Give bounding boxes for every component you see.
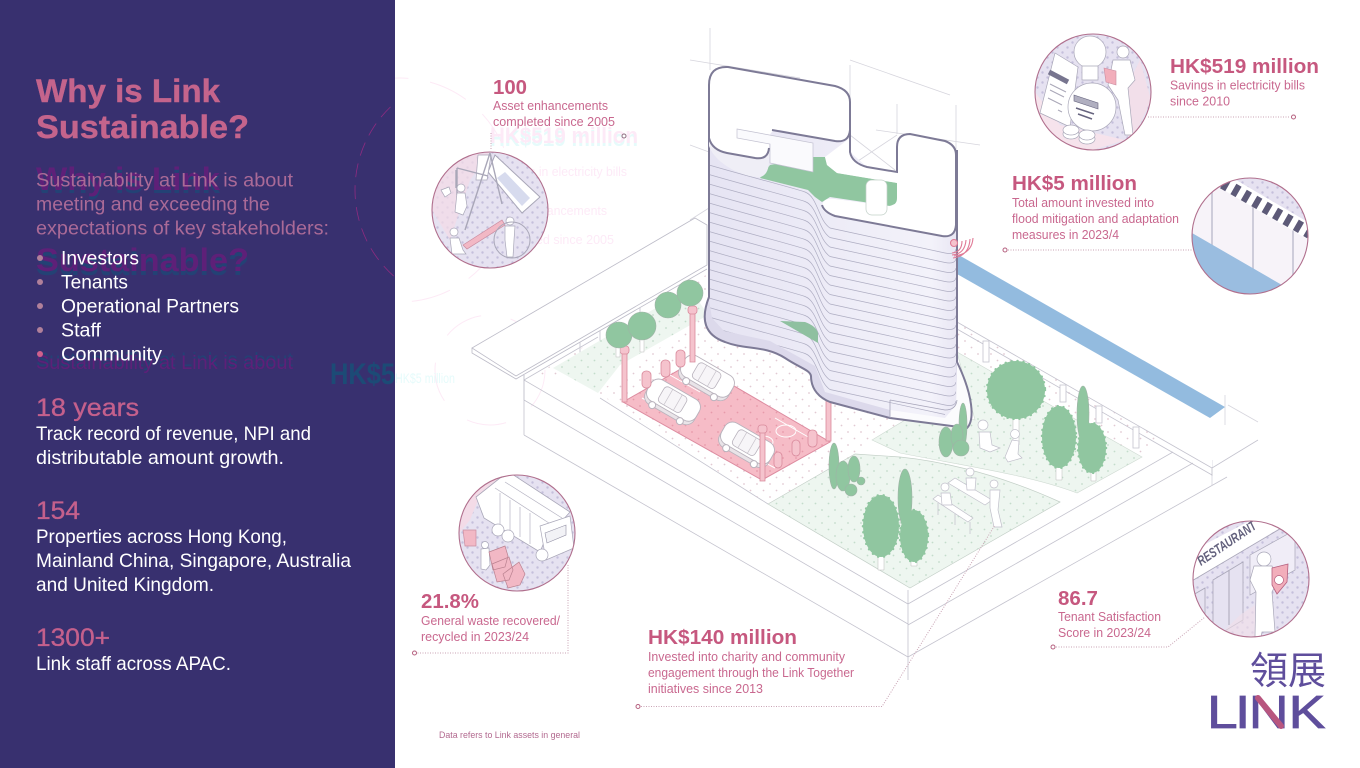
stat: 100 asset enhancements: completed since 2005 — [493, 114, 615, 129]
stat: 21.8% — [421, 591, 560, 644]
stat: HK$5 million: Total amount invested into — [1012, 195, 1154, 210]
footnote: Data refers to Link assets in general — [439, 730, 580, 741]
stat: 18 years: distributable amount growth. — [36, 447, 284, 469]
stat: 86.7: Score in 2023/24 — [1058, 625, 1151, 640]
light posts — [620, 306, 833, 481]
stakeholder list: Investors — [61, 248, 139, 270]
stat: HK$140 million: Invested into charity and community — [648, 649, 845, 664]
stat: 154 properties: and United Kingdom. — [36, 574, 214, 596]
stat: 86.7: Tenant Satisfaction — [1058, 609, 1161, 624]
pale ghost artefacts on white: HK$5 million — [395, 370, 455, 386]
logo: Link: LINK — [1207, 686, 1326, 738]
construction lines — [690, 28, 1258, 485]
dotted ground — [598, 312, 960, 504]
trees: left lawn — [606, 280, 703, 357]
stat: 21.8%: 21.8% — [421, 591, 479, 613]
chargers — [642, 350, 817, 468]
cars — [640, 352, 778, 473]
trees: front lawn — [829, 443, 928, 570]
stat: 154 properties — [36, 497, 351, 596]
pale ghost artefacts on white: HK$519 million — [490, 123, 638, 148]
stat: 86.7 — [1058, 588, 1161, 640]
stat: 21.8%: General waste recovered/ — [421, 613, 560, 628]
stat: 1300+ staff: Link staff across APAC. — [36, 653, 231, 675]
stat: HK$140 million — [648, 627, 855, 696]
stat: 1300+ staff: 1300+ — [36, 624, 110, 652]
icon: wifi signal on tower — [950, 238, 973, 258]
stat: 86.7: 86.7 — [1058, 588, 1098, 610]
vignette: flood barrier — [1191, 178, 1309, 294]
deck edge lines — [524, 337, 1227, 680]
intro text: meeting and exceeding the — [36, 194, 270, 216]
facade — [709, 130, 956, 418]
ghost artefacts behind text: Why is Link — [36, 164, 220, 200]
stat: HK$519 million — [1170, 56, 1319, 108]
ghost artefacts behind text: HK$5 — [330, 358, 395, 391]
ghost artefacts behind text: Why is Link — [36, 161, 220, 197]
vignette: waste truck — [459, 474, 575, 591]
intro text — [36, 170, 329, 240]
stakeholder list — [37, 248, 239, 366]
stakeholder list: Staff — [61, 320, 102, 342]
front lawn — [768, 454, 1060, 588]
pale ghost artefacts on white: completed since 2005 — [492, 232, 614, 247]
pale ghost artefacts on white: Savings in electricity bills — [492, 164, 627, 179]
podium outline — [705, 100, 972, 428]
stat: HK$5 million: flood mitigation and adaptation — [1012, 211, 1179, 226]
stat: HK$140 million: HK$140 million — [648, 627, 797, 649]
ghost artefacts behind text: Sustainable? — [36, 246, 249, 282]
ghost artefacts behind text — [36, 106, 394, 386]
stat: 100 asset enhancements: Asset enhancements — [493, 98, 608, 113]
stat: HK$5 million — [1012, 173, 1179, 242]
stakeholder list: Operational Partners — [61, 296, 239, 318]
people on lawn — [933, 420, 1022, 534]
stat: 21.8%: recycled in 2023/24 — [421, 629, 529, 644]
stat: 154 properties: Mainland China, Singapore, Australia — [36, 550, 351, 572]
stat: 100 asset enhancements: 100 — [493, 77, 527, 99]
stat: 18 years: Track record of revenue, NPI and — [36, 423, 311, 445]
trees: back lawn — [939, 361, 1106, 481]
stat: HK$140 million: initiatives since 2013 — [648, 681, 763, 696]
title: Why is Link — [36, 73, 220, 109]
left plank — [472, 218, 707, 400]
podium — [704, 200, 972, 428]
EV parking area — [620, 306, 833, 481]
right walkway and posts — [957, 298, 1258, 476]
leader lines — [412, 115, 1296, 708]
stat: HK$140 million: engagement through the Link Together — [648, 665, 855, 680]
stat: 18 years: 18 years — [36, 394, 139, 422]
lower planted terrace — [780, 321, 818, 343]
vignette: playground — [432, 152, 548, 268]
stat: HK$519 million: Savings in electricity bills — [1170, 78, 1305, 92]
stat: HK$519 million: HK$519 million — [1170, 56, 1319, 78]
panel: why is Link sustainable — [0, 0, 395, 768]
pale ghost artefacts on white: HK$519 million — [490, 126, 638, 151]
title: Sustainable? — [36, 109, 249, 145]
ghost artefacts behind text: Sustainable? — [36, 242, 249, 278]
sky courtyard — [760, 157, 898, 206]
stat: 100 asset enhancements — [493, 77, 615, 129]
logo: Link — [1207, 640, 1326, 738]
back lawn — [872, 352, 1142, 493]
stakeholder list: Tenants — [61, 272, 128, 294]
canal — [957, 254, 1225, 418]
left lawn — [553, 288, 708, 393]
roof slabs — [709, 67, 956, 236]
intro text: Sustainability at Link is about — [36, 170, 294, 192]
stakeholder list: Community — [61, 344, 162, 366]
stat: 154 properties: 154 — [36, 497, 80, 525]
stat: HK$5 million: HK$5 million — [1012, 173, 1137, 195]
tower — [704, 67, 972, 428]
vignette: restaurant — [1192, 520, 1310, 638]
ghost artefacts behind text: Sustainability at Link is about — [36, 349, 294, 371]
logo: Link: 領展 — [1250, 640, 1326, 695]
stat: HK$519 million: since 2010 — [1170, 94, 1230, 108]
pale ghost artefacts on white — [395, 78, 637, 426]
vignette: electricity savings — [1035, 34, 1151, 150]
pale ghost artefacts on white: Asset enhancements — [492, 203, 607, 218]
title — [36, 73, 249, 145]
stat: 1300+ staff — [36, 624, 231, 675]
stat: HK$5 million: measures in 2023/4 — [1012, 227, 1119, 242]
ghost artefacts behind text: Sustainability at Link is about — [36, 352, 294, 374]
stat: 18 years — [36, 394, 311, 469]
restaurant sign: RESTAURANT — [1194, 517, 1260, 568]
intro text: expectations of key stakeholders: — [36, 218, 329, 240]
stat: 154 properties: Properties across Hong Kong, — [36, 526, 287, 548]
isometric site illustration — [472, 28, 1258, 680]
